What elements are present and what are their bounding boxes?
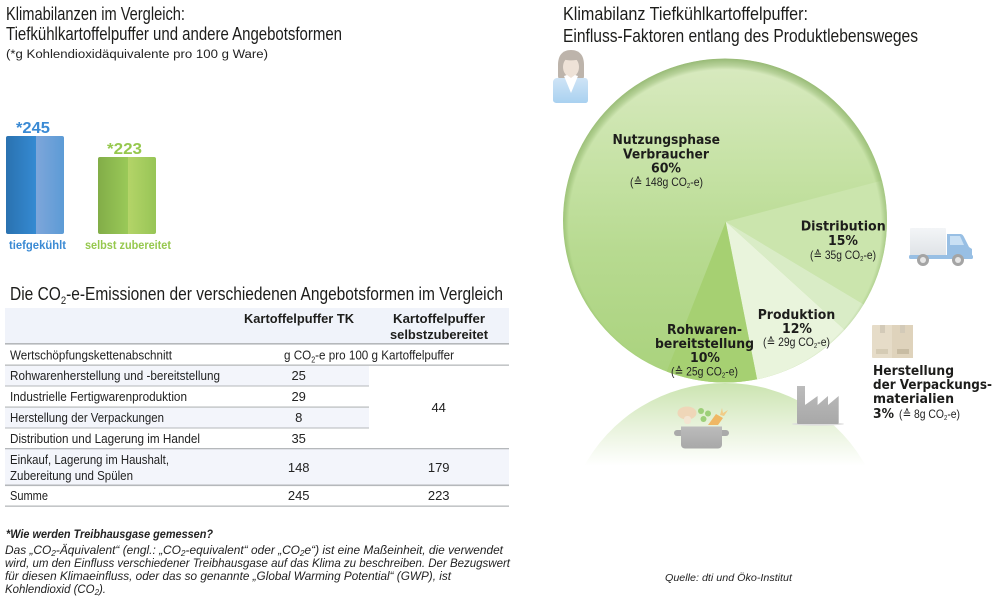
pie label: Produktion: 12% <box>782 322 812 337</box>
pie label: Nutzungsphase: 2 <box>687 183 690 190</box>
bar: selbst zubereitet: selbst zubereitet <box>85 238 171 252</box>
pie label: Distribution: -e) <box>863 248 876 262</box>
icon: factory <box>792 386 844 426</box>
table header: selbstzubereitet <box>390 327 489 342</box>
pie label: Rohwarenbereitstellung: 2 <box>722 373 725 380</box>
icon: consumer woman <box>553 50 588 103</box>
bar: tiefgekühlt: *245 <box>16 120 50 137</box>
title: bar comparison: Tiefkühlkartoffelpuffer und andere Angebotsformen <box>6 24 342 44</box>
table values: 25 <box>291 368 306 383</box>
table values: 179 <box>428 460 450 475</box>
pie label: Produktion: 2 <box>814 343 817 350</box>
subtitle: unit note: (*g Kohlendioxidäquivalente pro 100 g Ware) <box>6 49 268 61</box>
table values: 148 <box>288 460 310 475</box>
pie label: Rohwarenbereitstellung: -e) <box>725 365 738 379</box>
table row labels: Herstellung der Verpackungen <box>10 410 164 425</box>
pie label: Nutzungsphase: (≙ 148g CO <box>630 175 695 189</box>
label: Herstellung der Verpackungsmaterialien: der Verpackungs- <box>873 378 992 393</box>
pie reflection <box>582 383 868 470</box>
table row labels: Rohwarenherstellung und -bereitstellung <box>10 368 220 383</box>
pie label: Rohwarenbereitstellung: 10% <box>690 351 720 366</box>
text block: greenhouse gas footnote: für diesen Klimaeinfluss, oder das so genannte „Global Warming Potential“ (GWP), ist <box>5 571 452 583</box>
title: bar comparison: Klimabilanzen im Vergleich: <box>6 4 185 24</box>
label: Herstellung der Verpackungsmaterialien: (≙ 8g CO <box>899 407 951 421</box>
table row labels: Wertschöpfungskettenabschnitt <box>10 348 172 362</box>
pie label: Distribution: Distribution <box>801 220 886 235</box>
panel: emissions table <box>5 284 509 507</box>
text block: greenhouse gas footnote: 2 <box>299 549 305 558</box>
bar: selbst zubereitet: *223 <box>107 141 142 158</box>
table title: 2 <box>61 295 66 307</box>
icon: cardboard box <box>872 325 913 358</box>
source note: Quelle: dti und Öko-Institut <box>665 572 793 584</box>
pie label: Produktion: -e) <box>817 335 830 349</box>
pie label: Rohwarenbereitstellung: (≙ 25g CO <box>671 365 730 379</box>
table backgrounds <box>5 308 509 485</box>
pie label: Produktion: (≙ 29g CO <box>763 335 822 349</box>
pie label: Distribution: (≙ 35g CO <box>810 248 869 262</box>
table values: 223 <box>428 488 450 503</box>
table values: 2 <box>311 356 316 364</box>
title: life-cycle pie: Einfluss-Faktoren entlang des Produktlebensweges <box>563 26 918 46</box>
label: Herstellung der Verpackungsmaterialien: 2 <box>944 415 947 422</box>
title: bar comparison <box>6 4 342 44</box>
table title: Die CO <box>10 284 69 304</box>
pie label: Distribution: 15% <box>828 234 858 249</box>
table row labels: Distribution und Lagerung im Handel <box>10 431 200 446</box>
text block: greenhouse gas footnote: e“) ist eine Maßeinheit, die verwendet <box>305 545 504 557</box>
label: Herstellung der Verpackungsmaterialien: materialien <box>873 392 954 407</box>
bar: tiefgekühlt <box>6 120 66 252</box>
table row labels: Summe <box>10 488 48 503</box>
table header <box>244 311 489 342</box>
pie label: Distribution: 2 <box>860 256 864 263</box>
table header: Kartoffelpuffer <box>393 311 485 326</box>
bar: tiefgekühlt: tiefgekühlt <box>9 238 66 252</box>
text block: greenhouse gas footnote <box>5 529 511 597</box>
pie label: Rohwarenbereitstellung: Rohwaren- <box>667 323 742 338</box>
table header: Kartoffelpuffer TK <box>244 311 355 326</box>
text block: greenhouse gas footnote: Kohlendioxid (CO <box>5 584 95 596</box>
table title: -e-Emissionen der verschiedenen Angebotsformen im Vergleich <box>66 284 503 304</box>
label: Herstellung der Verpackungsmaterialien: 3% <box>873 407 894 422</box>
text block: greenhouse gas footnote: -equivalent“ oder „CO <box>186 545 300 557</box>
table values: 8 <box>295 410 302 425</box>
text block: greenhouse gas footnote: 2 <box>94 588 100 597</box>
label: Herstellung der Verpackungsmaterialien: Herstellung <box>873 364 954 379</box>
text block: greenhouse gas footnote: Das „CO <box>5 545 50 557</box>
table values: g CO <box>284 348 314 362</box>
table row labels <box>10 348 220 503</box>
table values: -e pro 100 g Kartoffelpuffer <box>315 348 455 362</box>
table values: 44 <box>431 400 446 415</box>
pie label: Produktion: Produktion <box>758 308 835 323</box>
pie label: Produktion <box>758 308 835 350</box>
table values: 35 <box>291 431 306 446</box>
table values: 29 <box>291 389 306 404</box>
pie label: Rohwarenbereitstellung: bereitstellung <box>655 337 754 352</box>
text block: greenhouse gas footnote: ). <box>97 584 106 596</box>
text block: greenhouse gas footnote: *Wie werden Treibhausgase gemessen? <box>6 529 213 541</box>
pie label: Nutzungsphase: 60% <box>651 162 681 177</box>
pie chart <box>563 58 887 382</box>
text block: greenhouse gas footnote: -Äquivalent“ (engl.: „CO <box>56 545 181 557</box>
text block: greenhouse gas footnote: 2 <box>50 549 56 558</box>
table row labels: Einkauf, Lagerung im Haushalt, <box>10 452 169 467</box>
icon: cooking pot with vegetables <box>674 406 729 448</box>
label: Herstellung der Verpackungsmaterialien: -e) <box>947 407 960 421</box>
text block: greenhouse gas footnote: 2 <box>180 549 186 558</box>
panel: bar comparison <box>6 4 342 252</box>
pie label: Nutzungsphase <box>612 133 720 190</box>
table values <box>284 348 455 503</box>
table row labels: Zubereitung und Spülen <box>10 468 133 483</box>
pie label: Distribution <box>801 220 886 263</box>
panel: life-cycle pie <box>553 4 1000 584</box>
pie label: Nutzungsphase: Nutzungsphase <box>612 133 720 148</box>
icon: truck <box>909 228 973 266</box>
table row labels: Industrielle Fertigwarenproduktion <box>10 389 187 404</box>
pie label: Nutzungsphase: Verbraucher <box>623 148 710 162</box>
pie label: Rohwarenbereitstellung <box>655 323 754 380</box>
text block: greenhouse gas footnote: wird, um den Einfluss verschiedener Treibhausgase auf das Klima zu beschreiben. Der Bezugswert <box>5 558 511 570</box>
pie label: Nutzungsphase: -e) <box>690 175 703 189</box>
bar: selbst zubereitet <box>85 141 171 252</box>
table values: 245 <box>288 488 310 503</box>
title: life-cycle pie <box>563 4 918 46</box>
label: Herstellung der Verpackungsmaterialien <box>873 364 992 422</box>
title: life-cycle pie: Klimabilanz Tiefkühlkartoffelpuffer: <box>563 4 808 24</box>
